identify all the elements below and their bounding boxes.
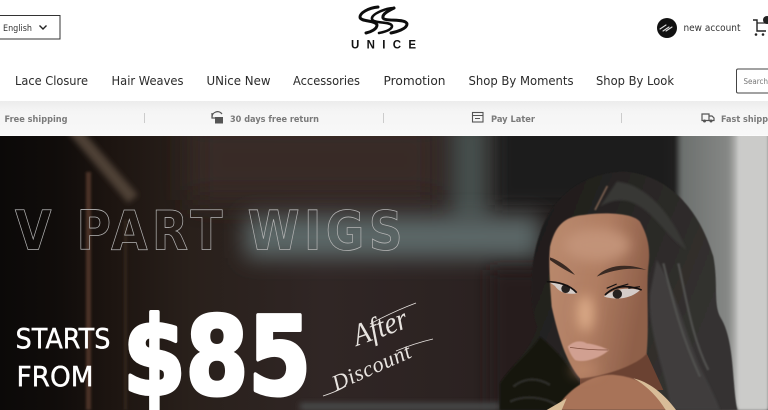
lips — [568, 341, 609, 361]
hero banner — [0, 120, 768, 410]
pay later: Pay Later — [491, 115, 536, 125]
neck — [580, 353, 663, 390]
fast shipping — [702, 114, 768, 125]
script: After Discount: After — [346, 300, 413, 353]
headline: V PART WIGS: V PART WIGS — [15, 200, 407, 262]
icon: logo swirls — [360, 7, 407, 33]
shoulder — [557, 375, 667, 410]
script: After Discount: Discount — [327, 338, 416, 396]
language selector — [0, 16, 60, 39]
navigation menu: Hair Weaves — [112, 74, 184, 89]
account link — [657, 18, 741, 38]
text: STARTS FROM — [16, 322, 110, 393]
navigation menu: Lace Closure — [15, 74, 88, 89]
search box — [736, 69, 768, 93]
forehead highlight — [563, 228, 630, 262]
nose highlight — [577, 295, 593, 332]
eyes — [550, 283, 577, 294]
icon: account badge — [657, 18, 677, 38]
script: After Discount — [323, 300, 433, 396]
woman portrait — [500, 172, 737, 410]
navigation menu: Promotion — [384, 74, 446, 89]
free shipping: Free shipping — [4, 115, 68, 125]
30 days free return — [212, 112, 319, 125]
icon: shopping cart — [753, 16, 768, 36]
navigation menu — [15, 74, 675, 89]
eyebrows — [550, 257, 647, 277]
text: STARTS FROM: STARTS — [16, 322, 110, 355]
30 days free return: 30 days free return — [230, 115, 319, 125]
navigation menu: UNice New — [206, 74, 270, 89]
text: STARTS FROM: FROM — [16, 360, 94, 393]
language selector: English — [3, 24, 32, 34]
navigation menu: Shop By Moments — [468, 74, 574, 89]
hair — [500, 172, 737, 410]
dress straps — [547, 378, 676, 410]
account link: new account — [684, 23, 741, 34]
navigation menu: Accessories — [293, 74, 360, 89]
navigation menu: Shop By Look — [596, 74, 675, 89]
logo: UNice — [351, 7, 416, 52]
hero backdrop — [0, 120, 768, 410]
pay later — [472, 112, 536, 125]
face — [549, 213, 649, 378]
service strip — [0, 101, 768, 136]
wordmark: UNICE — [351, 40, 416, 52]
